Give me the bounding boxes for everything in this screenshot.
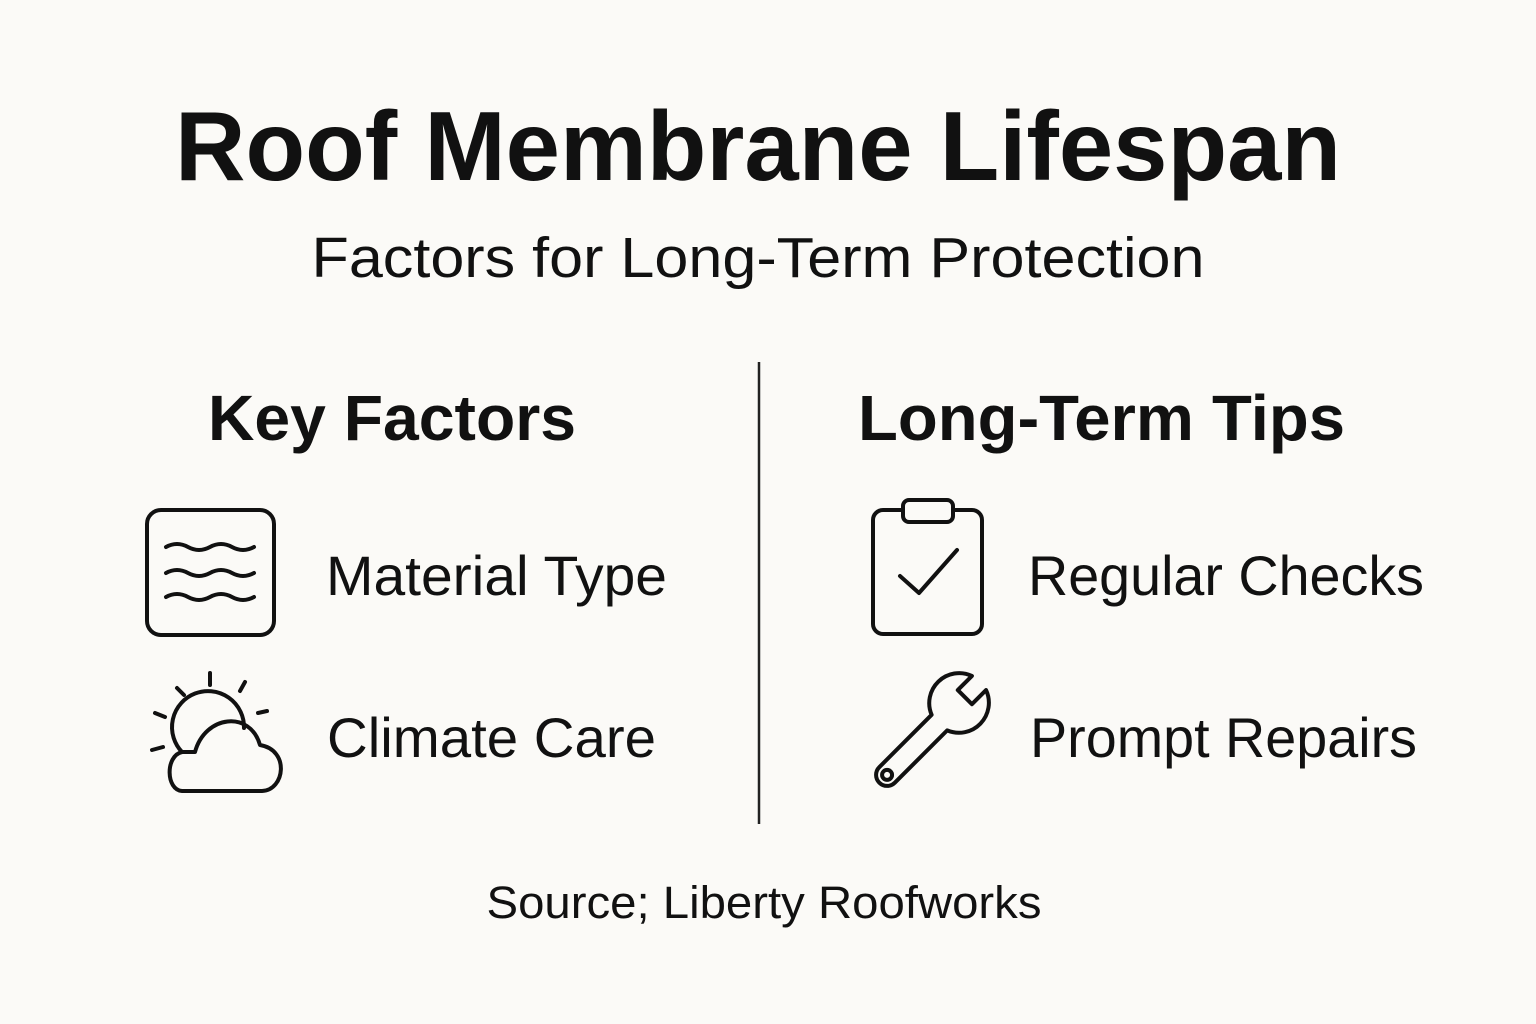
title: Roof Membrane Lifespan xyxy=(175,91,1341,201)
divider xyxy=(758,362,760,824)
subtitle: Factors for Long-Term Protection xyxy=(312,226,1204,290)
icon: sun and cloud xyxy=(152,673,281,791)
panel: key factors xyxy=(147,382,667,791)
panel: long-term tips xyxy=(858,382,1424,804)
text: material type: Material Type xyxy=(326,544,667,607)
text: prompt repairs: Prompt Repairs xyxy=(1030,706,1417,769)
source: Source; Liberty Roofworks xyxy=(486,877,1042,928)
text: regular checks: Regular Checks xyxy=(1028,544,1424,607)
icon: clipboard check xyxy=(873,500,982,634)
icon: wrench xyxy=(858,662,1000,804)
heading: key factors: Key Factors xyxy=(208,382,576,454)
text: climate care: Climate Care xyxy=(327,706,656,769)
icon: material layers xyxy=(147,510,274,635)
heading: long-term tips: Long-Term Tips xyxy=(858,382,1345,454)
